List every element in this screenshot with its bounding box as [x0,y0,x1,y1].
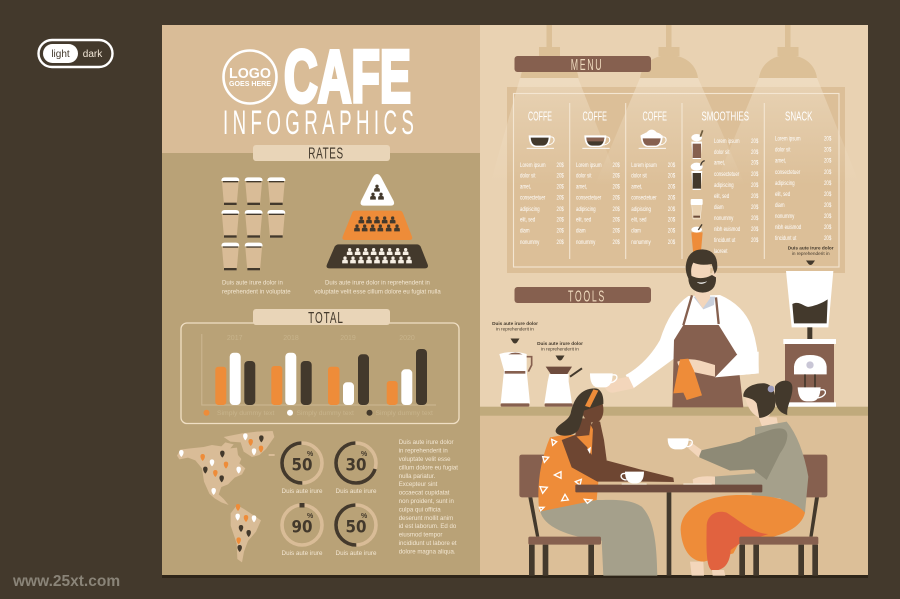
menu list: snack: 20$ [824,158,831,165]
menu list: coffee three: nonummy [631,239,651,246]
menu list: coffee one: 20$ [557,206,564,213]
chart legend: Simply dummy text [376,410,433,417]
heading: tools [514,287,651,305]
chart: people pyramid [327,174,428,268]
logo: GOES HERE [229,79,271,88]
menu list: smoothies: 20$ [751,138,758,145]
text block: body copy: deserunt mollit anim [399,515,453,522]
panel: cafe floor [480,415,868,575]
menu list: snack [775,136,831,242]
icon: milk jug [499,352,532,407]
menu list: snack: diam [775,202,785,209]
donut: 90 percent: 90 [292,518,312,536]
menu list: coffee three: 20$ [668,195,675,202]
icon: takeaway cups [221,177,285,270]
menu list: snack: dolor sit [775,147,791,154]
callout: jug: in reprehenderit in [496,326,534,331]
menu list: smoothies: 20$ [751,204,758,211]
bar chart: 2017 [227,335,243,342]
heading: total [253,309,390,327]
menu list: coffee one [520,162,564,246]
donut: 50 percent: % [307,451,314,458]
donut: second 50 percent: % [361,513,368,520]
woman right [681,381,808,576]
menu board [507,87,845,273]
menu list: coffee one: 20$ [557,173,564,180]
donut: 30 percent [336,443,377,495]
menu list: coffee one: diam [520,228,530,235]
menu list: coffee two: dolor sit [576,173,592,180]
icon: latte cup [582,135,610,148]
callout: pot: Duis aute irure dolor [537,341,583,346]
text block: body copy: in reprehenderit in [399,448,448,454]
donut: second 50 percent: 50 [346,518,366,536]
donut: 50 percent [282,443,323,495]
menu list: smoothies: 20$ [751,160,758,167]
heading: menu [514,55,651,74]
menu list: coffee two: 20$ [613,228,620,235]
text block: body copy: dolore magna aliqua. [399,548,456,555]
donut: second 50 percent [336,505,377,557]
icon: espresso cup [527,135,554,148]
menu list: coffee two: nonummy [576,239,596,246]
menu list: coffee one: elit, sed [520,217,535,224]
menu headers: COFFE [528,108,552,124]
menu list: snack: 20$ [824,235,831,242]
menu list: coffee one: consectetuer [520,195,545,202]
theme toggle [38,40,112,67]
menu list: coffee one: Lorem ipsum [520,162,546,169]
table and chair frames [528,485,819,576]
menu list: coffee two: 20$ [613,239,620,246]
donut: 30 percent: % [361,451,368,458]
text: cups caption: Duis aute irure dolor in [222,280,283,286]
menu list: snack: elit, sed [775,191,790,198]
icon: coffee grinder machine [783,271,836,407]
menu list: coffee two: consectetuer [576,195,601,202]
menu list: coffee two: Lorem ipsum [576,162,602,169]
chart legend: Simply dummy text [296,410,354,417]
text: pyramid caption: Duis aute irure dolor in reprehendent in [325,280,430,286]
menu list: smoothies: 20$ [751,215,758,222]
menu list: smoothies: 20$ [751,182,758,189]
menu list: smoothies: 20$ [751,149,758,156]
text block: body copy: Excepteur sint [399,481,438,488]
menu list: snack: 20$ [824,191,831,198]
menu list: coffee one: 20$ [557,239,564,246]
title: INFOGRAPHICS [223,103,414,141]
menu list: coffee one: nonummy [520,239,540,246]
menu list: coffee one: dolor sit [520,173,536,180]
donut: 90 percent: Duis aute irure [282,550,323,557]
menu list: coffee two: 20$ [613,162,620,169]
donut: 50 percent: Duis aute irure [282,488,323,495]
bar chart: 2018 [283,335,299,342]
menu list: coffee three [631,162,675,246]
menu list: coffee one: adipiscing [520,206,540,213]
icon: cappuccino cup [639,130,666,148]
callout: grinder: Duis aute irure dolor [788,246,834,250]
menu list: coffee two: 20$ [613,206,620,213]
menu list: snack: tincidunt ut [775,235,797,242]
text: pyramid caption: voluptate velit esse cillum dolore eu fugiat nulla [314,290,441,296]
menu list: snack: 20$ [824,147,831,154]
text block: body copy: eiusmod tempor [399,532,442,539]
menu list: smoothies: adipiscing [714,182,734,189]
donut: 90 percent [282,503,323,557]
menu list: coffee three: Lorem ipsum [631,162,657,169]
menu list: smoothies: nibh euismod [714,226,740,233]
menu list: smoothies: amet, [714,160,725,167]
menu list: snack: nonummy [775,213,795,220]
menu list: snack: 20$ [824,224,831,231]
menu list: smoothies: tincidunt ut [714,237,736,244]
icons: smoothie glasses [691,130,705,255]
coffee cups on table [621,438,712,485]
bar chart: 2019 [340,335,356,342]
panel: cafe wall [480,25,868,407]
menu list: smoothies [714,138,758,255]
menu list: smoothies: diam [714,204,724,211]
counter shelf [480,407,868,416]
menu list: snack: 20$ [824,136,831,143]
arrows: callout pointers [510,260,815,360]
callout: grinder: in reprehenderit in [792,251,830,256]
theme toggle: light [51,49,70,60]
menu list: snack: 20$ [824,169,831,176]
barista [590,249,759,407]
menu list: coffee three: 20$ [668,206,675,213]
menu list: snack: 20$ [824,180,831,187]
menu list: coffee three: consectetuer [631,195,657,202]
text block: body copy: voluptate velit esse [399,456,451,463]
menu list: coffee one: 20$ [557,184,564,191]
menu list: smoothies: laoreet [714,248,728,255]
text block: body copy: id est laborum. Ed do [399,523,457,530]
logo: LOGO [229,66,271,82]
chart legend [204,410,433,417]
menu list: snack: nibh euismod [775,224,801,231]
text block: body copy: incididunt ut labore et [399,540,457,547]
menu list: coffee three: amet, [631,184,643,191]
menu list: smoothies: 20$ [751,171,758,178]
menu list: coffee three: dolor sit [631,173,647,180]
text: cups caption: reprehendent in voluptate [222,290,291,296]
menu list: coffee two [576,162,620,246]
menu headers: COFFE [642,108,667,124]
text block: body copy: culpa qui officia [399,506,441,513]
menu list: coffee two: diam [576,228,586,235]
heading: menu: MENU [571,55,603,74]
menu list: snack: 20$ [824,202,831,209]
menu list: coffee two: 20$ [613,195,620,202]
menu list: coffee two: 20$ [613,173,620,180]
panel: left header background [162,25,480,153]
map: world with pins [177,431,275,562]
menu list: coffee three: adipiscing [631,206,651,213]
light cones [490,78,860,185]
chair backs [519,455,827,497]
menu list: smoothies: elit, sed [714,193,729,200]
heading: rates [253,144,390,162]
menu headers: SMOOTHIES [702,108,749,124]
menu list: coffee three: 20$ [668,239,675,246]
theme toggle: dark [83,49,103,60]
title [223,35,414,141]
heading: total: TOTAL [308,309,344,327]
menu list: snack: 20$ [824,213,831,220]
chart frame [181,323,459,424]
menu headers: SNACK [785,108,813,124]
menu list: snack: amet, [775,158,786,165]
text block: body copy: non proident, sunt in [399,498,454,505]
hanging lamps [520,25,817,78]
donut: 30 percent: Duis aute irure [336,488,377,495]
heading: tools: TOOLS [568,287,606,305]
menu list: smoothies: nonummy [714,215,734,222]
menu list: smoothies: 20$ [751,226,758,233]
menu headers: COFFE [582,108,607,124]
menu list: snack: adipiscing [775,180,795,187]
donut: 30 percent: 30 [346,456,366,474]
panel: left body background [162,153,480,575]
menu list: coffee two: adipiscing [576,206,596,213]
menu list: coffee three: elit, sed [631,217,647,224]
menu list: coffee one: 20$ [557,195,564,202]
logo [224,50,276,104]
menu list: smoothies: 20$ [751,237,758,244]
menu list: coffee two: amet, [576,184,587,191]
menu list: coffee two: 20$ [613,184,620,191]
menu list: smoothies: consectetuer [714,171,739,178]
title: CAFE [284,35,411,118]
menu frame and dividers [514,94,839,267]
menu list: coffee three: 20$ [668,184,675,191]
menu list: coffee one: 20$ [557,217,564,224]
menu list: coffee one: 20$ [557,228,564,235]
menu headers [528,108,813,124]
menu list: snack: consectetuer [775,169,800,176]
donut: 50 percent: 50 [292,456,312,474]
menu list: coffee three: 20$ [668,173,675,180]
woman left [538,388,674,576]
icon: coffee pot [544,367,582,407]
callout: jug: Duis aute irure dolor [492,321,538,326]
panel shadow [162,574,868,578]
text block: body copy: cillum dolore eu fugiat [399,464,458,471]
donut: second 50 percent: Duis aute irure [336,550,377,557]
bar chart [202,334,436,405]
menu list: smoothies: dolor sit [714,149,730,156]
text block: body copy: Duis aute irure dolor [399,439,454,446]
donut: 90 percent: % [307,513,314,520]
menu list: coffee three: 20$ [668,162,675,169]
menu list: coffee three: diam [631,228,641,235]
chart legend: Simply dummy text [217,410,275,417]
menu list: smoothies: Lorem ipsum [714,138,740,145]
bar chart: 2020 [399,335,415,342]
heading: rates: RATES [308,144,344,162]
menu list: coffee three: 20$ [668,228,675,235]
menu list: coffee one: amet, [520,184,531,191]
menu list: coffee two: elit, sed [576,217,591,224]
text block: body copy: occaecat cupidatat [399,490,450,497]
menu list: coffee one: 20$ [557,162,564,169]
watermark: www.25xt.com [12,573,120,590]
menu list: snack: Lorem ipsum [775,136,801,143]
text block: body copy: nulla pariatur. [399,473,436,480]
callout: pot: in reprehenderit in [541,346,579,351]
menu list: coffee three: 20$ [668,217,675,224]
menu list: smoothies: 20$ [751,193,758,200]
menu list: coffee two: 20$ [613,217,620,224]
